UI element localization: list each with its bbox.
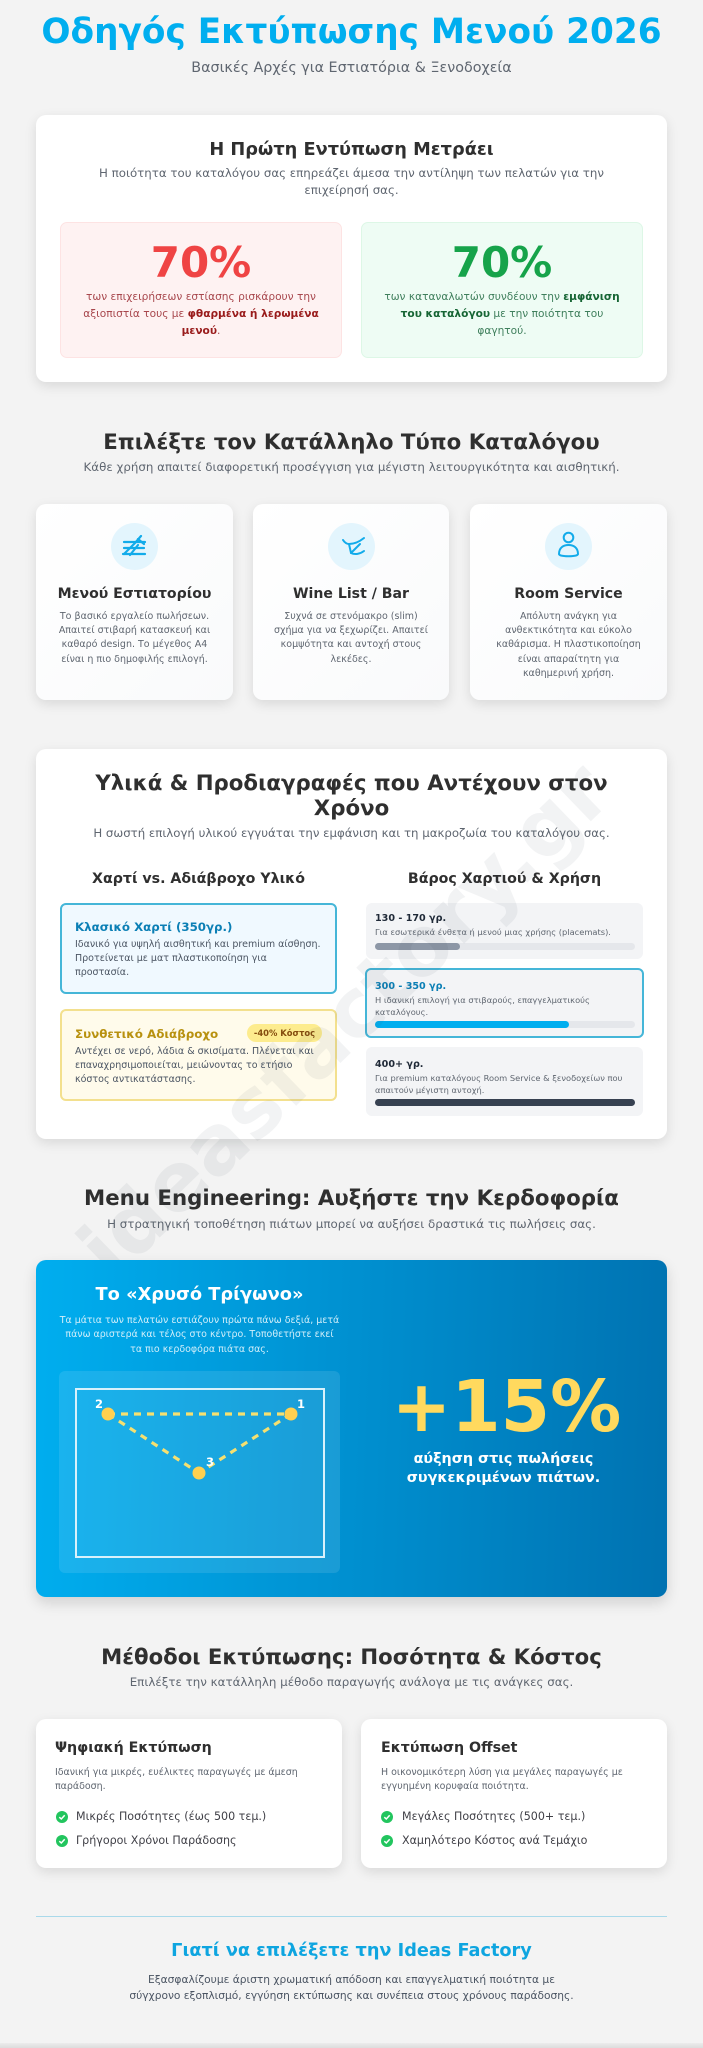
feature: large quantities: Μεγάλες Ποσότητες (500+ τεμ.) <box>402 1810 585 1823</box>
card text: καθάρισμα. Η πλαστικοποίηση <box>496 639 641 650</box>
footer text: Εξασφαλίζουμε άριστη χρωματική απόδοση και επαγγελματική ποιότητα με <box>148 1973 555 1986</box>
badge: minus 40 percent cost: -40% Κόστος <box>254 1028 315 1038</box>
stat text: συγκεκριμένων πιάτων. <box>407 1470 600 1486</box>
card text: Απαιτεί στιβαρή κατασκευή και <box>59 625 210 636</box>
weight row: 300-350 gsm <box>365 968 644 1038</box>
card text: παράδοση. <box>55 1781 106 1792</box>
icon: check <box>381 1811 393 1823</box>
icon: cutlery <box>111 523 158 570</box>
panel: wine list <box>253 504 449 700</box>
text: golden triangle: πάνω αριστερά και τέλος στο κέντρο. Τοποθετήστε εκεί <box>65 1329 334 1340</box>
diagram: golden triangle on a menu page <box>59 1371 340 1573</box>
stat text <box>384 291 620 337</box>
feature: fast delivery: Γρήγοροι Χρόνοι Παράδοσης <box>76 1834 237 1847</box>
panel: materials and specifications <box>36 749 667 1139</box>
heading: first impression: Η Πρώτη Εντύπωση Μετράει <box>209 140 494 160</box>
card text <box>381 1767 623 1792</box>
card text: εγγυημένη κορυφαία ποιότητα. <box>381 1781 529 1792</box>
text: first impression intro: Η ποιότητα του καταλόγου σας επηρεάζει άμεσα την αντίληψη των πελατών για την <box>99 166 604 180</box>
card text <box>496 611 641 679</box>
text: first impression intro: επιχείρησή σας. <box>304 183 399 197</box>
weight row: 400+ gsm <box>366 1047 643 1116</box>
weight text: Για premium καταλόγους Room Service & ξενοδοχείων που <box>375 1073 622 1083</box>
text: golden triangle: τα πιο κερδοφόρα πιάτα σας. <box>130 1344 269 1355</box>
panel: room service <box>470 504 667 700</box>
card text <box>59 611 210 665</box>
card title: Μενού Εστιατορίου <box>58 586 211 602</box>
text: golden triangle: Τα μάτια των πελατών εστιάζουν πρώτα πάνω δεξιά, μετά <box>60 1315 339 1326</box>
footer heading: Γιατί να επιλέξετε την Ideas Factory <box>171 1941 532 1961</box>
weight label: 400+ γρ. <box>375 1059 423 1070</box>
diagram: golden triangle on a menu page: 1 <box>297 1397 305 1411</box>
watermark: ideasfactory.gr <box>60 744 629 1297</box>
card text: Απόλυτη ανάγκη για <box>520 611 617 622</box>
footer text: σύγχρονο εξοπλισμό, εγγύηση εκτύπωσης και συνέπεια στους χρόνους παράδοσης. <box>129 1989 574 2002</box>
subtitle: menu engineering: Η στρατηγική τοποθέτηση πιάτων μπορεί να αυξήσει δραστικά τις πωλήσεις σας. <box>107 1217 596 1231</box>
card text: Συχνά σε στενόμακρο (slim) <box>284 611 418 622</box>
card text: καθαρό design. Το μέγεθος Α4 <box>62 639 207 650</box>
card text: είναι η πιο δημοφιλής επιλογή. <box>61 654 208 665</box>
card text: σχήμα για να ξεχωρίζει. Απαιτεί <box>274 625 428 636</box>
weight row: 130-170 gsm <box>366 903 643 959</box>
stat text: των καταναλωτών συνδέουν την εμφάνιση <box>384 291 620 303</box>
box title: Συνθετικό Αδιάβροχο <box>75 1027 218 1041</box>
stat text: αύξηση στις πωλήσεις <box>414 1451 593 1467</box>
subtitle: catalogue types: Κάθε χρήση απαιτεί διαφορετική προσέγγιση για μέγιστη λειτουργικότητα και αισθητική. <box>84 460 619 474</box>
subtitle: printing methods: Επιλέξτε την κατάλληλη μέθοδο παραγωγής ανάλογα με τις ανάγκες σας. <box>130 1675 573 1689</box>
icon: check <box>56 1835 68 1847</box>
bar: 75 percent <box>375 1021 635 1028</box>
heading: golden triangle: Το «Χρυσό Τρίγωνο» <box>96 1284 303 1305</box>
weight text: απαιτούν μέγιστη αντοχή. <box>375 1085 484 1095</box>
bar: full <box>375 1099 635 1106</box>
card title: Εκτύπωση Offset <box>381 1740 517 1756</box>
text: first impression intro <box>99 166 604 197</box>
heading: menu engineering: Menu Engineering: Αυξήστε την Κερδοφορία <box>84 1186 619 1211</box>
box text <box>75 939 321 978</box>
subheading: paper weight: Βάρος Χαρτιού & Χρήση <box>408 871 601 887</box>
stat text: φαγητού. <box>477 325 527 337</box>
card text: Ιδανική για μικρές, ευέλικτες παραγωγές με άμεση <box>55 1767 298 1778</box>
weight label: 300 - 350 γρ. <box>375 981 446 992</box>
feature: lower unit cost: Χαμηλότερο Κόστος ανά Τεμάχιο <box>402 1834 587 1847</box>
icon: person <box>545 523 592 570</box>
heading: materials: Χρόνο <box>314 796 389 821</box>
card text: κομψότητα και αντοχή στους <box>281 639 421 650</box>
diagram: golden triangle on a menu page: 3 <box>206 1455 214 1469</box>
card text <box>274 611 428 665</box>
title: Οδηγός Εκτύπωσης Μενού 2026 <box>41 12 662 52</box>
card text <box>55 1767 298 1792</box>
stat number: 70% <box>452 238 552 287</box>
subtitle: Βασικές Αρχές για Εστιατόρια & Ξενοδοχεία <box>191 60 512 76</box>
box text: κόστος αντικατάστασης. <box>75 1074 196 1085</box>
heading: printing methods: Μέθοδοι Εκτύπωσης: Ποσότητα & Κόστος <box>101 1644 602 1669</box>
heading: materials <box>95 771 608 821</box>
panel: first impression <box>36 115 667 382</box>
card title: Ψηφιακή Εκτύπωση <box>55 1740 212 1756</box>
weight text: Για εσωτερικά ένθετα ή μενού μιας χρήσης (placemats). <box>375 927 611 937</box>
card text: Το βασικό εργαλείο πωλήσεων. <box>60 611 209 622</box>
box title: Κλασικό Χαρτί (350γρ.) <box>75 920 232 934</box>
card text: Η οικονομικότερη λύση για μεγάλες παραγωγές με <box>381 1767 623 1778</box>
stat text: του καταλόγου με την ποιότητα του <box>401 308 603 320</box>
stat text: μενού. <box>182 325 220 337</box>
weight text: Η ιδανική επιλογή για στιβαρούς, επαγγελματικούς <box>375 995 590 1005</box>
stat text: των επιχειρήσεων εστίασης ρισκάρουν την <box>86 291 316 303</box>
text: golden triangle <box>60 1315 339 1355</box>
icon: check <box>56 1811 68 1823</box>
weight text <box>375 995 590 1017</box>
card text: ανθεκτικότητα και εύκολο <box>505 625 632 636</box>
box: synthetic waterproof <box>60 1009 337 1101</box>
stat text <box>407 1451 600 1486</box>
stat card: green 70% <box>361 222 643 358</box>
heading: catalogue types: Επιλέξτε τον Κατάλληλο Τύπο Καταλόγου <box>103 430 600 455</box>
box text: Προτείνεται με ματ πλαστικοποίηση για <box>75 953 267 964</box>
weight label: 130 - 170 γρ. <box>375 913 446 924</box>
stat text: αξιοπιστία τους με φθαρμένα ή λερωμένα <box>83 308 319 320</box>
heading: materials: Υλικά & Προδιαγραφές που Αντέχουν στον <box>95 771 608 796</box>
panel: golden triangle <box>36 1260 667 1597</box>
footer text <box>129 1973 574 2002</box>
stat text <box>83 291 319 337</box>
box: classic paper <box>60 903 337 994</box>
box text <box>75 1046 314 1085</box>
box text: προστασία. <box>75 967 129 978</box>
box text: επαναχρησιμοποιείται, μειώνοντας το ετήσιο <box>75 1060 292 1071</box>
card text: καθημερινή χρήση. <box>523 668 614 679</box>
subtitle: materials: Η σωστή επιλογή υλικού εγγυάται την εμφάνιση και τη μακροζωία του καταλόγου σας. <box>93 826 610 840</box>
icon: glass <box>328 523 375 570</box>
weight text: καταλόγους. <box>375 1007 428 1017</box>
subheading: paper vs waterproof: Χαρτί vs. Αδιάβροχο Υλικό <box>92 871 305 887</box>
card title: Wine List / Bar <box>293 586 409 602</box>
stat number: 70% <box>151 238 251 287</box>
panel: restaurant menu <box>36 504 233 700</box>
card text: είναι απαραίτητη για <box>518 654 619 665</box>
card text: λεκέδες. <box>330 654 372 665</box>
stat card: red 70% <box>60 222 342 358</box>
weight text <box>375 1073 622 1095</box>
diagram: golden triangle on a menu page: 2 <box>95 1397 103 1411</box>
box text: Ιδανικό για υψηλή αισθητική και premium αίσθηση. <box>75 939 321 950</box>
bar: 33 percent <box>375 943 635 950</box>
stat: plus 15 percent: +15% <box>392 1365 621 1448</box>
icon: check <box>381 1835 393 1847</box>
panel: digital printing <box>36 1719 342 1868</box>
box text: Αντέχει σε νερό, λάδια & σκισίματα. Πλένεται και <box>75 1046 314 1057</box>
badge: minus 40 percent cost <box>247 1024 322 1042</box>
panel: offset printing <box>361 1719 667 1868</box>
card title: Room Service <box>514 586 623 602</box>
feature: small quantities: Μικρές Ποσότητες (έως 500 τεμ.) <box>76 1810 266 1823</box>
